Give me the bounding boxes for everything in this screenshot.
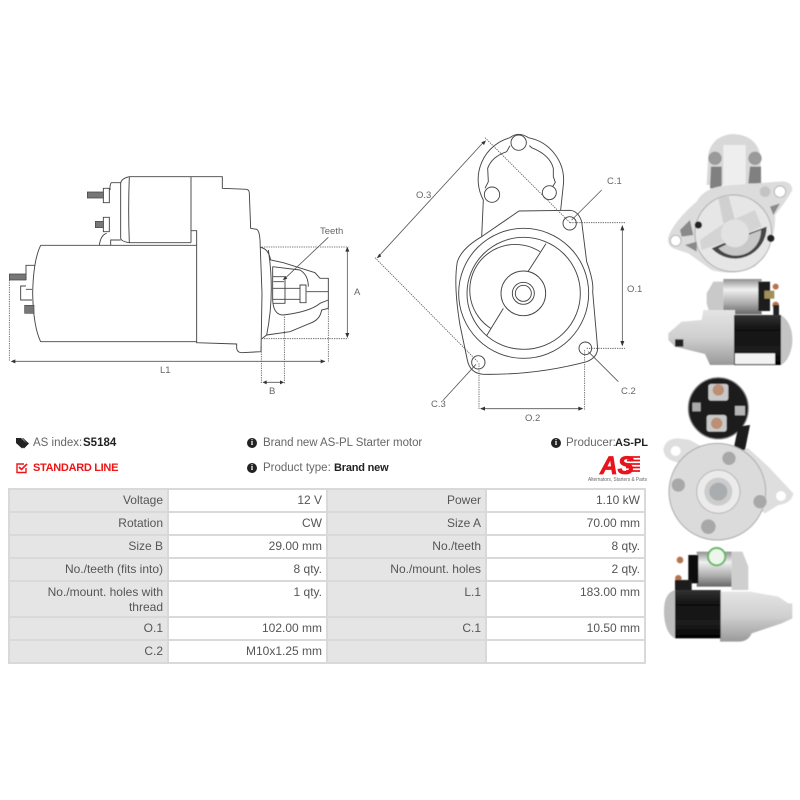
specifications table: 2 qty. bbox=[612, 562, 640, 576]
specifications table: Voltage bbox=[123, 493, 163, 507]
info: standard line: STANDARD LINE bbox=[33, 462, 118, 474]
upper flange inner cutout bbox=[485, 146, 555, 188]
dimension lines front view bbox=[375, 138, 625, 411]
info: description: Brand new AS-PL Starter motor bbox=[263, 437, 422, 449]
info: AS index bbox=[16, 437, 116, 449]
bearing housing circles bbox=[459, 228, 589, 358]
info: producer bbox=[566, 437, 648, 449]
info icon: i bbox=[555, 438, 557, 447]
specifications table: 12 V bbox=[297, 493, 322, 507]
motor body bbox=[33, 245, 197, 342]
specifications table: 29.00 mm bbox=[269, 539, 322, 553]
specifications table: Size B bbox=[128, 539, 163, 553]
specifications table: 8 qty. bbox=[612, 539, 640, 553]
specifications table: Power bbox=[447, 493, 481, 507]
front view labels: C.3 bbox=[431, 399, 446, 410]
info: AS index: AS index: bbox=[33, 437, 82, 449]
mounting flange outline bbox=[456, 134, 598, 374]
specifications table: 10.50 mm bbox=[587, 621, 640, 635]
info icon bbox=[247, 438, 257, 448]
side view labels bbox=[160, 226, 361, 397]
front view labels: C.1 bbox=[607, 176, 622, 187]
info: product type: Brand new bbox=[334, 462, 388, 474]
specifications table: 1 qty. bbox=[294, 585, 322, 599]
specifications table: Rotation bbox=[118, 516, 163, 530]
specifications table: C.2 bbox=[144, 644, 163, 658]
specifications table: No./mount. holes with thread bbox=[48, 585, 163, 614]
specifications table: M10x1.25 mm bbox=[246, 644, 322, 658]
specifications table: No./teeth (fits into) bbox=[65, 562, 163, 576]
front view technical drawing bbox=[374, 134, 642, 424]
solenoid terminals bbox=[87, 188, 109, 232]
front view labels: C.2 bbox=[621, 386, 636, 397]
photo: starter side view with black motor bbox=[668, 279, 792, 365]
specifications table: No./mount. holes bbox=[390, 562, 481, 576]
logo: AS bbox=[588, 454, 647, 483]
product photos bbox=[663, 134, 794, 642]
side view technical drawing bbox=[8, 176, 361, 397]
specifications table bbox=[8, 488, 646, 664]
icon: checked box bbox=[16, 463, 28, 474]
info: product type: Product type: bbox=[263, 462, 331, 474]
info: producer: Producer: bbox=[566, 437, 616, 449]
specifications table: 1.10 kW bbox=[596, 493, 640, 507]
photo: starter side view opposite bbox=[664, 548, 792, 642]
solenoid and drive housing outline bbox=[99, 177, 262, 353]
side view labels: A bbox=[354, 287, 361, 298]
icon: tags bbox=[16, 438, 29, 448]
specifications table: CW bbox=[302, 516, 322, 530]
photo: starter rear view bbox=[663, 378, 793, 540]
dimension lines side view bbox=[9, 237, 349, 384]
photo: starter drive-end view bbox=[668, 134, 792, 273]
specifications table: 102.00 mm bbox=[262, 621, 322, 635]
specifications table: 70.00 mm bbox=[587, 516, 640, 530]
info: product type bbox=[263, 462, 389, 474]
front view labels: O.2 bbox=[525, 413, 540, 424]
specifications table: C.1 bbox=[462, 621, 481, 635]
info: producer: AS-PL bbox=[615, 437, 648, 449]
specifications table: Size A bbox=[447, 516, 481, 530]
info icon: i bbox=[251, 463, 253, 472]
side view labels: Teeth bbox=[320, 226, 343, 237]
specifications table: O.1 bbox=[144, 621, 163, 635]
info icon bbox=[247, 463, 257, 473]
specifications table: 8 qty. bbox=[294, 562, 322, 576]
side view labels: B bbox=[269, 386, 275, 397]
front view labels bbox=[416, 176, 642, 424]
mounting holes bbox=[472, 135, 592, 369]
side view labels: L1 bbox=[160, 365, 171, 376]
info icon bbox=[551, 438, 561, 448]
front view labels: O.3 bbox=[416, 190, 431, 201]
specifications table: 183.00 mm bbox=[580, 585, 640, 599]
drive nose bbox=[260, 247, 328, 338]
rear terminals bbox=[9, 265, 35, 313]
info icon: i bbox=[251, 438, 253, 447]
specifications table: L.1 bbox=[464, 585, 481, 599]
front view labels: O.1 bbox=[627, 284, 642, 295]
info: AS index: S5184 bbox=[83, 437, 116, 449]
specifications table: No./teeth bbox=[432, 539, 481, 553]
